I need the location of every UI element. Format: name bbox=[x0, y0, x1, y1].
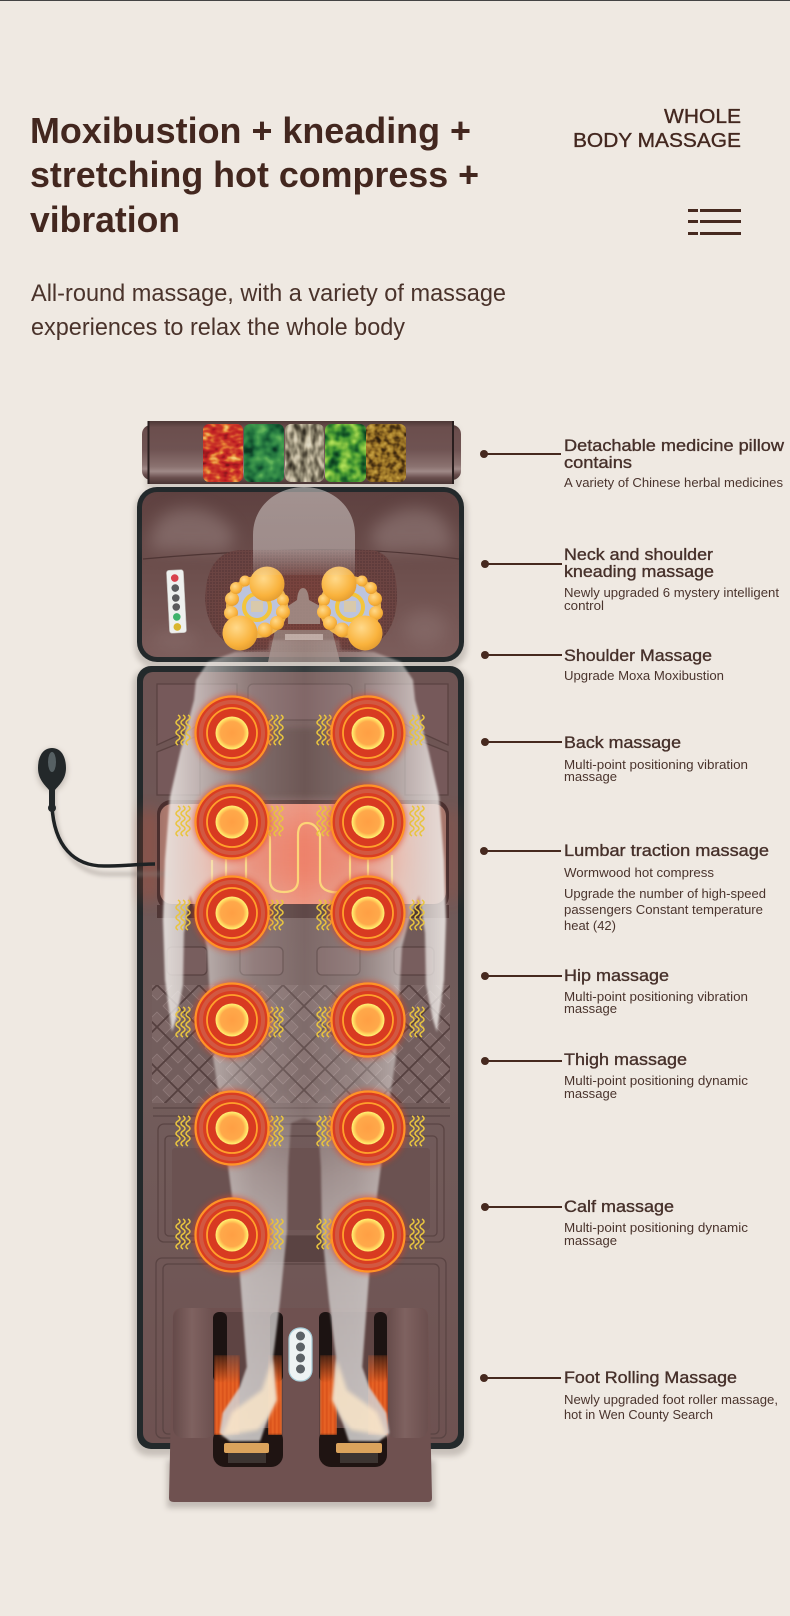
callout: lumbar: heat (42) bbox=[564, 918, 616, 933]
title: vibration bbox=[30, 199, 180, 240]
left kneading head bbox=[222, 566, 290, 650]
callout: lumbar: Lumbar traction massage bbox=[564, 841, 769, 860]
heat point: upper back right bbox=[317, 694, 424, 772]
callout: pillow bbox=[480, 436, 785, 490]
hand air pump and hose bbox=[37, 748, 172, 874]
hip panels bbox=[167, 947, 434, 975]
title: Moxibustion + kneading + bbox=[30, 110, 471, 151]
legs highlight bbox=[218, 1090, 391, 1441]
heat point: calf right bbox=[317, 1196, 424, 1274]
herb: golden bbox=[366, 424, 406, 482]
callout: foot: hot in Wen County Search bbox=[564, 1407, 713, 1422]
herb: red bbox=[203, 424, 243, 482]
callout: neck and shoulder: kneading massage bbox=[564, 562, 714, 581]
callout: lumbar: passengers Constant temperature bbox=[564, 902, 763, 917]
herb: grey root bbox=[285, 424, 324, 482]
heat point: hip left bbox=[176, 981, 283, 1059]
heat point: upper back left bbox=[176, 694, 283, 772]
title: stretching hot compress + bbox=[30, 154, 479, 195]
callout: thigh: Thigh massage bbox=[564, 1050, 687, 1069]
upper back panels bbox=[157, 684, 448, 795]
mesh panel bbox=[205, 550, 397, 652]
callout: back: massage bbox=[564, 769, 617, 784]
foot massager bbox=[167, 1308, 435, 1508]
callout: hip: Hip massage bbox=[564, 966, 669, 985]
heat point: mid back left bbox=[176, 783, 283, 861]
calf panels bbox=[153, 1108, 450, 1438]
callout: calf bbox=[481, 1197, 749, 1248]
callout: lumbar: Wormwood hot compress bbox=[564, 865, 714, 880]
callout: shoulder: Upgrade Moxa Moxibustion bbox=[564, 668, 724, 683]
heat point: thigh right bbox=[317, 1089, 424, 1167]
left foot well bbox=[213, 1312, 283, 1467]
callout: thigh: Multi-point positioning dynamic bbox=[564, 1073, 749, 1088]
callout: shoulder: Shoulder Massage bbox=[564, 646, 712, 665]
remote control bbox=[166, 570, 187, 633]
lower back shading bbox=[232, 728, 372, 798]
heading: whole body massage: WHOLE bbox=[664, 106, 741, 128]
callout: calf: Calf massage bbox=[564, 1197, 674, 1216]
top rule bbox=[0, 0, 790, 1]
callout: lumbar bbox=[480, 841, 769, 933]
heat point: mid back right bbox=[317, 783, 424, 861]
callout: neck and shoulder: Newly upgraded 6 mystery intelligent bbox=[564, 585, 779, 600]
heat point: calf left bbox=[176, 1196, 283, 1274]
neck pad bbox=[135, 487, 467, 668]
heat point: lumbar right bbox=[317, 874, 424, 952]
quilted section bbox=[152, 985, 450, 1103]
body pad bbox=[133, 666, 469, 1456]
callout: pillow: contains bbox=[564, 453, 632, 472]
central bracket bbox=[268, 588, 340, 662]
subtitle bbox=[31, 280, 506, 341]
heading: whole body massage: BODY MASSAGE bbox=[573, 130, 741, 152]
callout: back: Back massage bbox=[564, 733, 681, 752]
callout: calf: massage bbox=[564, 1233, 617, 1248]
foot controller bbox=[289, 1328, 312, 1381]
callout: lumbar: Upgrade the number of high-speed bbox=[564, 886, 766, 901]
rollers bbox=[173, 1308, 215, 1438]
heat point: thigh left bbox=[176, 1089, 283, 1167]
callout: foot: Newly upgraded foot roller massage, bbox=[564, 1392, 778, 1407]
subtitle: experiences to relax the whole body bbox=[31, 314, 405, 341]
callout: hip: massage bbox=[564, 1001, 617, 1016]
right kneading head bbox=[317, 566, 383, 650]
heading: whole body massage bbox=[573, 106, 741, 152]
foot glow bbox=[222, 1360, 277, 1436]
callout: pillow: A variety of Chinese herbal medicines bbox=[564, 475, 783, 490]
heat point: hip right bbox=[317, 981, 424, 1059]
human silhouette bbox=[163, 487, 446, 1441]
title bbox=[30, 110, 479, 240]
herb: green bbox=[244, 424, 284, 482]
callout: neck and shoulder: control bbox=[564, 598, 604, 613]
callout: back bbox=[481, 733, 748, 784]
callout: foot bbox=[480, 1368, 778, 1422]
callout: neck and shoulder: Neck and shoulder bbox=[564, 545, 713, 564]
callout: foot: Foot Rolling Massage bbox=[564, 1368, 737, 1387]
medicine pillow bbox=[142, 421, 461, 488]
herb: light green bbox=[325, 424, 366, 482]
callout: pillow: Detachable medicine pillow bbox=[564, 436, 785, 455]
right foot well bbox=[319, 1312, 388, 1467]
icon: menu lines bbox=[688, 209, 741, 235]
callout: hip bbox=[481, 966, 748, 1016]
subtitle: All-round massage, with a variety of massage bbox=[31, 280, 506, 307]
callout: thigh: massage bbox=[564, 1086, 617, 1101]
callout: neck and shoulder bbox=[481, 545, 779, 613]
heat point: lumbar left bbox=[176, 874, 283, 952]
heating wire bbox=[212, 823, 392, 892]
callout: thigh bbox=[481, 1050, 749, 1101]
lumbar glow bbox=[142, 800, 456, 918]
callout: shoulder bbox=[481, 646, 724, 683]
callout: calf: Multi-point positioning dynamic bbox=[564, 1220, 749, 1235]
callout: back: Multi-point positioning vibration bbox=[564, 757, 748, 772]
callout: hip: Multi-point positioning vibration bbox=[564, 989, 748, 1004]
